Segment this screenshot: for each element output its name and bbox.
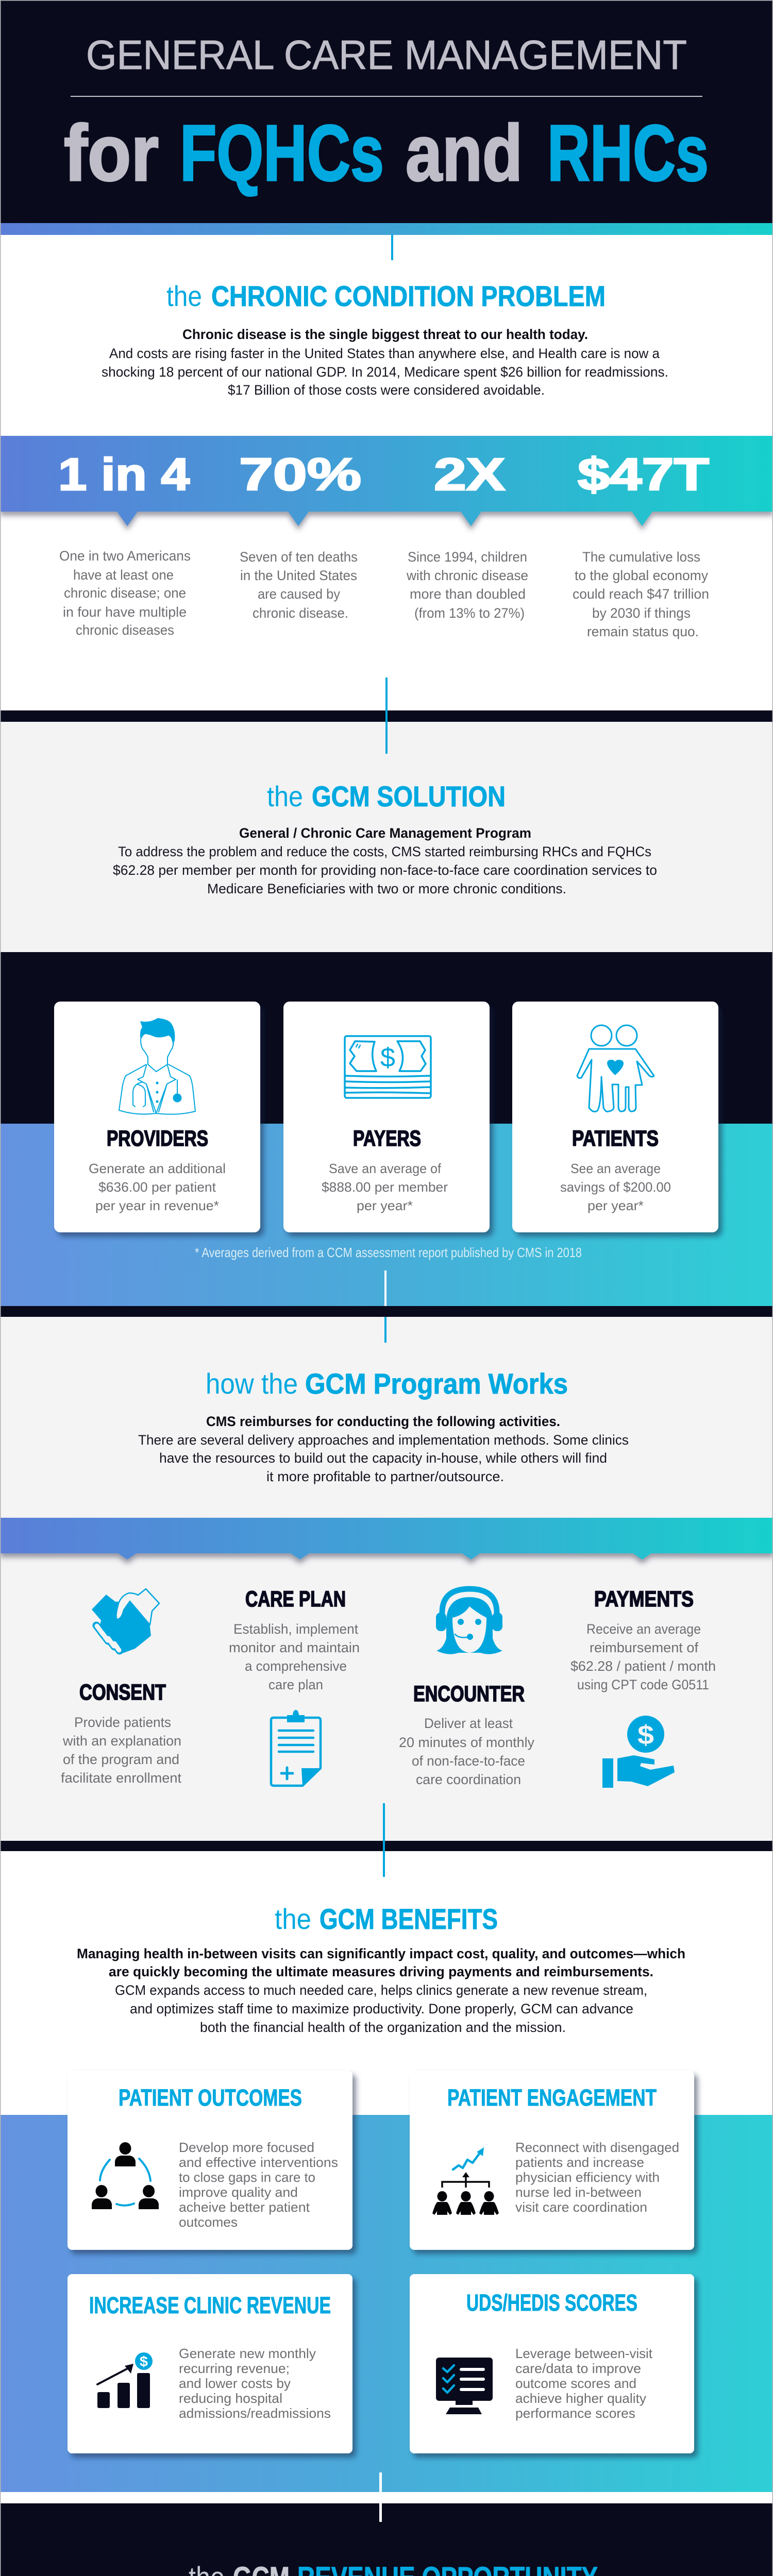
- stat: 1 in 4: 1 in 4: [58, 449, 190, 500]
- icon: clipboard: [271, 1710, 321, 1787]
- card text: Generate new monthly: [179, 2346, 316, 2361]
- card text: [89, 1161, 226, 1213]
- heading: the chronic condition problem: the: [166, 280, 202, 312]
- card text: reducing hospital: [179, 2391, 282, 2406]
- step text: [399, 1716, 534, 1787]
- panel: patient engagement: [410, 2071, 694, 2250]
- icon: rising bars: $: [140, 2353, 148, 2369]
- text block: chronic disease intro: shocking 18 percent of our national GDP. In 2014, Medicare spent $26 billion for readmissions.: [102, 364, 668, 380]
- card title: PATIENTS: [572, 1126, 659, 1151]
- card text: $888.00 per member: [322, 1179, 448, 1195]
- stat text: seven of ten: chronic disease.: [253, 605, 348, 621]
- icon: hand with dollar coin: $: [637, 1720, 654, 1750]
- card text: per year*: [357, 1198, 413, 1213]
- text block: benefits intro: [77, 1946, 685, 2035]
- text block: CMS reimburses: it more profitable to partner/outsource.: [266, 1469, 504, 1484]
- step text: with an explanation: [62, 1733, 181, 1749]
- card text: improve quality and: [179, 2184, 298, 2200]
- stat text: cumulative loss: The cumulative loss: [582, 549, 700, 565]
- card title: INCREASE CLINIC REVENUE: [89, 2292, 331, 2318]
- step text: monitor and maintain: [229, 1640, 360, 1655]
- stat text: cumulative loss: could reach $47 trillion: [573, 586, 709, 602]
- step title: CARE PLAN: [245, 1587, 346, 1612]
- card text: [322, 1161, 448, 1213]
- step title: ENCOUNTER: [413, 1682, 525, 1706]
- stat text: since 1994: with chronic disease: [406, 568, 528, 583]
- stat text: seven of ten: in the United States: [240, 568, 357, 583]
- card text: [515, 2140, 679, 2215]
- text block: benefits intro: and optimizes staff time to maximize productivity. Done properly, GCM can advance: [130, 2001, 633, 2016]
- step: consent: [61, 1589, 181, 1786]
- step text: of the program and: [63, 1752, 179, 1767]
- icon: doctor: [119, 1018, 195, 1114]
- step text: Establish, implement: [233, 1621, 358, 1637]
- step: care plan: [229, 1587, 360, 1787]
- step text: care plan: [268, 1677, 323, 1692]
- panel: patient outcomes: [68, 2071, 352, 2250]
- step text: Receive an average: [586, 1621, 701, 1637]
- stat text: seven of ten: Seven of ten deaths: [240, 549, 358, 565]
- text block: benefits intro: GCM expands access to much needed care, helps clinics generate a new revenue stream,: [115, 1982, 647, 1998]
- stat text: seven of ten: are caused by: [258, 586, 340, 602]
- card text: See an average: [570, 1161, 661, 1176]
- icon: stack of money: [345, 1036, 431, 1098]
- card text: visit care coordination: [515, 2199, 647, 2215]
- text block: CMS reimburses: CMS reimburses for conducting the following activities.: [206, 1414, 560, 1429]
- text block: GCM solution: [113, 825, 657, 896]
- text block: chronic disease intro: And costs are rising faster in the United States than anywhere else, and Health care is now a: [109, 346, 660, 361]
- panel: patients card: [512, 1002, 718, 1232]
- text block: chronic disease intro: $17 Billion of those costs were considered avoidable.: [228, 382, 545, 398]
- icon: rising bars: [97, 2352, 153, 2408]
- title line: for FQHCs and RHCs: FQHCs: [180, 109, 384, 197]
- icon: care team circle: [92, 2142, 159, 2209]
- panel: increase clinic revenue: [68, 2274, 352, 2453]
- stat text: cumulative loss: to the global economy: [575, 568, 708, 583]
- step text: care coordination: [416, 1772, 521, 1787]
- stat text: since 1994: (from 13% to 27%): [414, 605, 525, 621]
- title line: for FQHCs and RHCs: [64, 109, 709, 197]
- text block: chronic disease intro: Chronic disease is the single biggest threat to our health today.: [182, 327, 588, 342]
- stat text: cumulative loss: [573, 549, 709, 639]
- stat: 2X: 2X: [434, 449, 505, 500]
- card text: $636.00 per patient: [98, 1179, 216, 1195]
- stat text: one in two: in four have multiple: [63, 604, 187, 620]
- card text: achieve higher quality: [515, 2391, 646, 2406]
- heading: how the GCM program works: GCM Program Works: [305, 1367, 568, 1400]
- text block: CMS reimburses: There are several delivery approaches and implementation methods. Some clinics: [138, 1432, 629, 1448]
- card text: performance scores: [515, 2405, 635, 2421]
- icon: couple with heart: [577, 1025, 654, 1112]
- step text: 20 minutes of monthly: [399, 1735, 534, 1750]
- panel: providers card: [54, 1002, 260, 1232]
- text block: benefits intro: both the financial health of the organization and the mission.: [200, 2020, 566, 2035]
- card text: nurse led in-between: [515, 2184, 642, 2200]
- card title: UDS/HEDIS SCORES: [466, 2290, 637, 2316]
- stat text: since 1994: more than doubled: [410, 586, 526, 602]
- text block: GCM solution: $62.28 per member per month for providing non-face-to-face care coordination services to: [113, 862, 657, 878]
- card title: PATIENT OUTCOMES: [119, 2084, 302, 2111]
- stat text: one in two: chronic diseases: [76, 622, 174, 638]
- step text: [61, 1715, 181, 1786]
- heading: the GCM solution: GCM SOLUTION: [312, 780, 506, 812]
- panel: payers card: [283, 1002, 490, 1232]
- text block: CMS reimburses: have the resources to build out the capacity in-house, while others will find: [159, 1450, 607, 1466]
- step text: using CPT code G0511: [577, 1677, 709, 1692]
- panel: UDS/HEDIS scores: [410, 2274, 694, 2453]
- card title: PAYERS: [353, 1126, 421, 1151]
- icon: stack of money: $: [380, 1043, 395, 1073]
- text block: benefits intro: Managing health in-between visits can significantly impact cost, quality, and outcomes—which: [77, 1946, 685, 1961]
- step text: a comprehensive: [245, 1658, 347, 1674]
- heading: the GCM benefits: GCM BENEFITS: [320, 1903, 498, 1935]
- footnote: * Averages derived from a CCM assessment report published by CMS in 2018: [195, 1245, 582, 1260]
- step text: facilitate enrollment: [61, 1770, 181, 1786]
- card text: outcome scores and: [515, 2376, 636, 2391]
- card text: outcomes: [179, 2214, 238, 2230]
- card text: [515, 2346, 653, 2421]
- card text: per year in revenue*: [95, 1198, 219, 1213]
- title line: for FQHCs and RHCs: for: [64, 109, 159, 197]
- step text: Provide patients: [74, 1715, 171, 1730]
- card text: per year*: [587, 1198, 644, 1213]
- stat: 70%: 70%: [239, 449, 361, 500]
- step text: of non-face-to-face: [412, 1753, 525, 1769]
- step text: Deliver at least: [424, 1716, 513, 1731]
- step: payments: [570, 1587, 716, 1788]
- step title: CONSENT: [79, 1680, 166, 1705]
- text block: GCM solution: Medicare Beneficiaries with two or more chronic conditions.: [207, 881, 566, 896]
- icon: team growth: [432, 2147, 499, 2215]
- stat text: one in two: [59, 548, 191, 638]
- card text: to close gaps in care to: [179, 2170, 315, 2185]
- card text: [179, 2346, 331, 2421]
- stat text: seven of ten: [240, 549, 358, 621]
- card text: physician efficiency with: [515, 2170, 660, 2185]
- title line: for FQHCs and RHCs: RHCs: [547, 109, 709, 197]
- stat text: one in two: One in two Americans: [59, 548, 191, 564]
- icon: headset agent: [436, 1589, 502, 1654]
- card text: [179, 2140, 338, 2230]
- stat text: cumulative loss: by 2030 if things: [592, 605, 691, 621]
- stat text: since 1994: [406, 549, 528, 621]
- text block: benefits intro: are quickly becoming the ultimate measures driving payments and reimbursements.: [109, 1964, 653, 1979]
- step text: [229, 1621, 360, 1692]
- step text: reimbursement of: [590, 1640, 698, 1655]
- icon: hand with dollar coin: [602, 1716, 675, 1788]
- card text: Reconnect with disengaged: [515, 2140, 679, 2155]
- text block: GCM solution: General / Chronic Care Management Program: [239, 825, 531, 841]
- card text: Leverage between-visit: [515, 2346, 653, 2361]
- stat text: cumulative loss: remain status quo.: [587, 624, 699, 639]
- heading: how the GCM program works: [206, 1367, 568, 1400]
- stat: $47T: $47T: [578, 449, 709, 500]
- card text: Save an average of: [329, 1161, 442, 1176]
- title line: General Care Management: GENERAL CARE MANAGEMENT: [86, 32, 687, 78]
- step text: [570, 1621, 716, 1692]
- card text: care/data to improve: [515, 2361, 641, 2376]
- card text: and lower costs by: [179, 2376, 291, 2391]
- card text: acheive better patient: [179, 2199, 310, 2215]
- stats banner: [0, 436, 773, 526]
- step title: PAYMENTS: [594, 1587, 694, 1612]
- text block: GCM solution: To address the problem and reduce the costs, CMS started reimbursing RHCs and FQHCs: [118, 844, 651, 859]
- icon: handshake: [92, 1589, 159, 1654]
- stat text: one in two: chronic disease; one: [64, 585, 186, 601]
- heading: the GCM revenue opportunity: [189, 2561, 598, 2576]
- card text: savings of $200.00: [560, 1179, 671, 1195]
- heading: how the GCM program works: how the: [206, 1367, 298, 1400]
- text block: CMS reimburses: [138, 1414, 629, 1484]
- heading: the GCM benefits: the: [275, 1903, 311, 1935]
- icon: monitor checklist: [436, 2358, 493, 2414]
- card text: recurring revenue;: [179, 2361, 290, 2376]
- card text: admissions/readmissions: [179, 2405, 331, 2421]
- card text: [560, 1161, 671, 1213]
- stat text: since 1994: Since 1994, children: [408, 549, 527, 565]
- step: encounter: [399, 1589, 534, 1787]
- card text: Generate an additional: [89, 1161, 226, 1176]
- step text: $62.28 / patient / month: [570, 1658, 716, 1674]
- card title: PATIENT ENGAGEMENT: [447, 2084, 657, 2111]
- card text: and effective interventions: [179, 2155, 338, 2170]
- title line: for FQHCs and RHCs: and: [406, 109, 523, 197]
- heading: the GCM benefits: [275, 1903, 498, 1935]
- card text: patients and increase: [515, 2155, 644, 2170]
- stat text: one in two: have at least one: [73, 567, 174, 583]
- banner with pointers: [0, 1518, 773, 1560]
- card text: Develop more focused: [179, 2140, 314, 2155]
- card title: PROVIDERS: [107, 1126, 208, 1151]
- text block: chronic disease intro: [102, 327, 668, 398]
- panel: header title: [0, 0, 773, 235]
- heading: the chronic condition problem: CHRONIC CONDITION PROBLEM: [211, 280, 606, 312]
- heading: the GCM solution: the: [267, 780, 303, 812]
